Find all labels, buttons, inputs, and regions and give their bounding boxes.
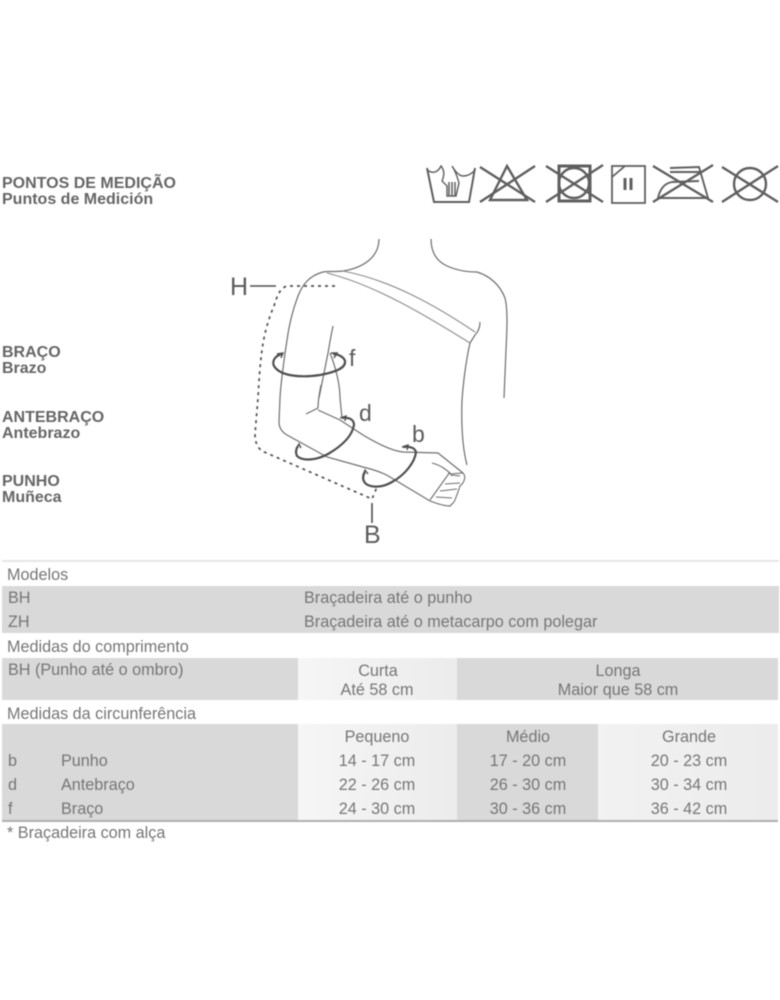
models rows: Braçadeira até o metacarpo com polegar [304, 613, 597, 631]
ring b [363, 445, 416, 487]
label: arm [2, 344, 61, 377]
label B: B [364, 521, 381, 549]
circumference row labels: Punho [61, 752, 108, 770]
label: forearm: ANTEBRAÇO [2, 409, 104, 426]
length: long: Maior que 58 cm [558, 681, 678, 699]
size: medium: Médio [506, 728, 550, 746]
size: small: 22 - 26 cm [339, 776, 415, 794]
label: arm: BRAÇO [2, 344, 61, 361]
length: long [457, 658, 778, 700]
circumference row labels: b [8, 752, 17, 770]
circumference row labels: Antebraço [61, 776, 135, 794]
label: arm: Brazo [2, 360, 46, 377]
circumference row labels: d [8, 776, 17, 794]
label d: d [359, 400, 372, 426]
models rows [2, 586, 779, 633]
icon: no bleach [480, 166, 535, 202]
models rows: ZH [8, 613, 30, 631]
length: long: Longa [595, 662, 641, 680]
size: large: Grande [662, 728, 716, 746]
shoulder strap [327, 271, 475, 343]
body and arm outline [279, 239, 507, 506]
size: small: Pequeno [345, 728, 409, 746]
icon: hand wash [427, 166, 475, 202]
label: forearm [2, 409, 104, 442]
length row label [2, 658, 298, 700]
label: wrist: PUNHO [2, 473, 60, 490]
footnote: * Braçadeira com alça [7, 824, 165, 842]
circumference row labels: Braço [61, 800, 103, 818]
label: forearm: Antebrazo [2, 425, 80, 442]
circumference row labels: f [8, 800, 12, 818]
ring f [273, 353, 345, 376]
size: medium: 17 - 20 cm [490, 752, 566, 770]
label b: b [412, 421, 425, 447]
size: large: 36 - 42 cm [651, 800, 727, 818]
size: large [598, 724, 778, 820]
circumference heading: Medidas da circunferência [7, 705, 196, 723]
size: medium: 26 - 30 cm [490, 776, 566, 794]
length: short: Curta [358, 662, 398, 680]
heading: measuring points: Puntos de Medición [2, 191, 153, 208]
dotted length line [255, 286, 377, 499]
length heading: Medidas do comprimento [7, 638, 189, 656]
models heading: Modelos [7, 566, 68, 584]
size: small: 14 - 17 cm [339, 752, 415, 770]
length: short [298, 658, 457, 700]
size: small: 24 - 30 cm [339, 800, 415, 818]
icon: no tumble dry [546, 165, 603, 202]
size: small [298, 724, 457, 820]
tick lines [250, 286, 372, 523]
label H: H [230, 273, 248, 301]
size: medium [457, 724, 598, 820]
length row label: BH (Punho até o ombro) [8, 661, 183, 679]
heading: measuring points: PONTOS DE MEDIÇÃO [2, 175, 176, 192]
length: short: Até 58 cm [341, 681, 413, 699]
label: wrist [2, 473, 62, 506]
icon: do not dry clean [722, 166, 778, 202]
label f: f [349, 345, 355, 371]
models rows: BH [8, 589, 30, 607]
size: large: 30 - 34 cm [651, 776, 727, 794]
icon: dry flat [612, 166, 645, 203]
models rows: Braçadeira até o punho [304, 589, 472, 607]
ring d [296, 416, 354, 460]
icon: do not iron [653, 165, 713, 202]
table [2, 560, 780, 842]
size: medium: 30 - 36 cm [490, 800, 566, 818]
label: wrist: Muñeca [2, 489, 62, 506]
heading: measuring points [2, 173, 176, 208]
size: large: 20 - 23 cm [651, 752, 727, 770]
circumference row labels [2, 724, 298, 820]
